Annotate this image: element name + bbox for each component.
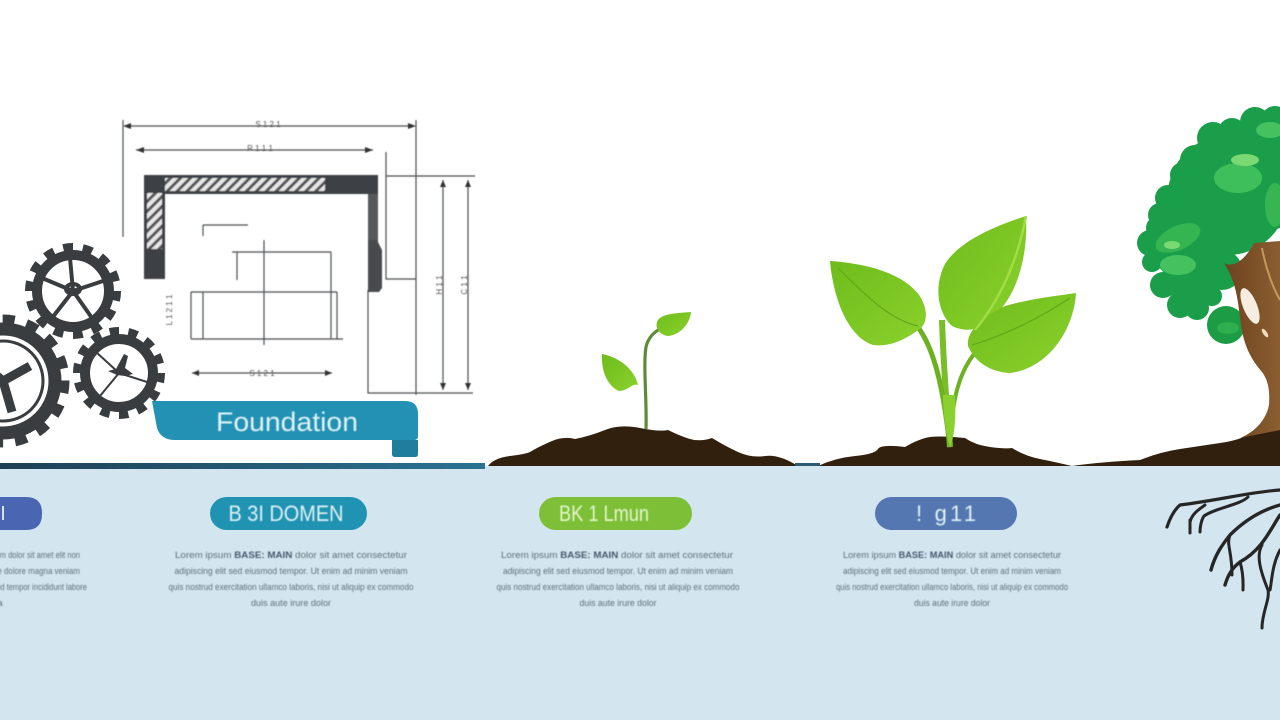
ground line [0, 463, 485, 469]
text block: second step: quis nostrud exercitation ullamco laboris, nisi ut aliquip ex commodo [168, 582, 414, 593]
gears [0, 247, 161, 443]
text block: third step: duis aute irure dolor [580, 598, 656, 609]
text block: fourth step: adipiscing elit sed eiusmod tempor. Ut enim ad minim veniam [843, 566, 1061, 577]
soil mounds [488, 426, 1280, 466]
technical drawing: R 1 1 1 [247, 144, 273, 153]
gear right [77, 331, 161, 415]
technical drawing: S 1 2 1 [255, 120, 281, 129]
gear large [0, 319, 65, 443]
text block: second step: duis aute irure dolor [251, 598, 331, 609]
foundation banner [152, 401, 418, 457]
tree trunk [1224, 241, 1280, 438]
lower background panel [0, 466, 1280, 720]
icon: large plant [830, 216, 1076, 448]
icon: small sprout [602, 312, 691, 429]
pill: second step: B 3I DOMEN [228, 501, 344, 526]
text block: fourth step: quis nostrud exercitation ullamco laboris, nisi ut aliquip ex commodo [836, 582, 1068, 593]
text block: third step: quis nostrud exercitation ullamco laboris, nisi ut aliquip ex commodo [496, 582, 740, 593]
text block: second step [168, 550, 414, 609]
icon: tree [1137, 106, 1280, 438]
text block: second step: Lorem ipsum BASE: MAIN dolor sit amet consectetur [175, 550, 407, 561]
pill: third step [539, 497, 692, 530]
technical drawing: S 1 2 1 [249, 369, 275, 378]
technical drawing [123, 120, 475, 395]
foundation banner: Foundation [216, 407, 358, 437]
technical drawing: L 1 2 1 1 [165, 294, 174, 325]
technical drawing: C 1 1 [460, 275, 469, 295]
pill: second step [210, 497, 367, 530]
pill: first step (cropped) [0, 497, 42, 530]
tree canopy [1137, 106, 1280, 344]
pill: fourth step: ! g11 [916, 501, 976, 526]
icon: tree roots [1167, 490, 1280, 628]
gear top [29, 247, 117, 335]
technical drawing: H 1 1 [435, 275, 444, 295]
text block: third step [496, 550, 740, 609]
pill: first step (cropped): I [0, 503, 6, 525]
text block: fourth step: Lorem ipsum BASE: MAIN dolor sit amet consectetur [843, 550, 1061, 561]
text block: second step: adipiscing elit sed eiusmod tempor. Ut enim ad minim veniam [174, 566, 408, 577]
pill: fourth step [875, 497, 1017, 530]
text block: fourth step [836, 550, 1068, 609]
text block: first step (cropped) [0, 550, 87, 609]
text block: third step: adipiscing elit sed eiusmod tempor. Ut enim ad minim veniam [503, 566, 733, 577]
text block: third step: Lorem ipsum BASE: MAIN dolor sit amet consectetur [501, 550, 733, 561]
pill: third step: BK 1 Lmun [559, 501, 649, 526]
text block: fourth step: duis aute irure dolor [914, 598, 990, 609]
